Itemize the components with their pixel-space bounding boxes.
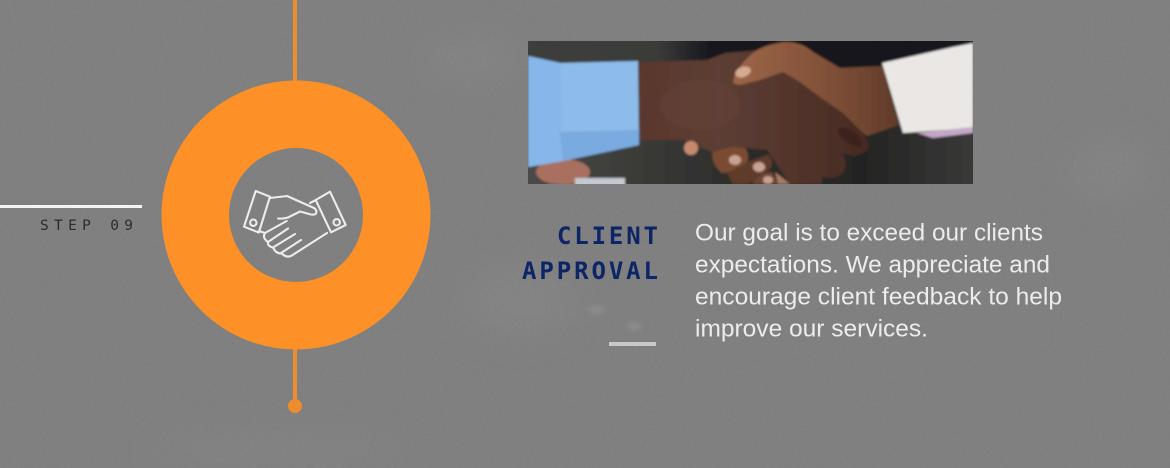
left hand (dark) — [639, 50, 869, 184]
body text: encourage client feedback to help — [695, 284, 1062, 310]
upper hand — [270, 196, 316, 219]
orange ring — [195, 114, 397, 316]
body text: expectations. We appreciate and — [695, 252, 1050, 278]
photo background — [528, 41, 973, 184]
lower hand fingers — [259, 221, 327, 257]
right hand (light) with thumb on top — [733, 42, 899, 136]
heading: client approval: APPROVAL — [522, 257, 658, 285]
left cuff — [244, 191, 270, 232]
photo: handshake — [528, 41, 973, 184]
short divider bar — [609, 342, 656, 346]
blue shirt sleeve — [528, 56, 639, 167]
heading: client approval: CLIENT — [557, 222, 658, 250]
step marker line — [0, 205, 142, 208]
body text: Our goal is to exceed our clients — [695, 220, 1043, 246]
body text: improve our services. — [695, 316, 928, 342]
white shirt cuff — [882, 43, 973, 138]
vertical timeline line with end dot — [288, 0, 302, 413]
heading: client approval — [522, 222, 658, 285]
step label: STEP 09 — [40, 218, 133, 234]
right cuff — [316, 192, 346, 232]
body text — [695, 220, 1062, 342]
fingers — [712, 147, 748, 173]
icon: handshake — [244, 191, 346, 257]
